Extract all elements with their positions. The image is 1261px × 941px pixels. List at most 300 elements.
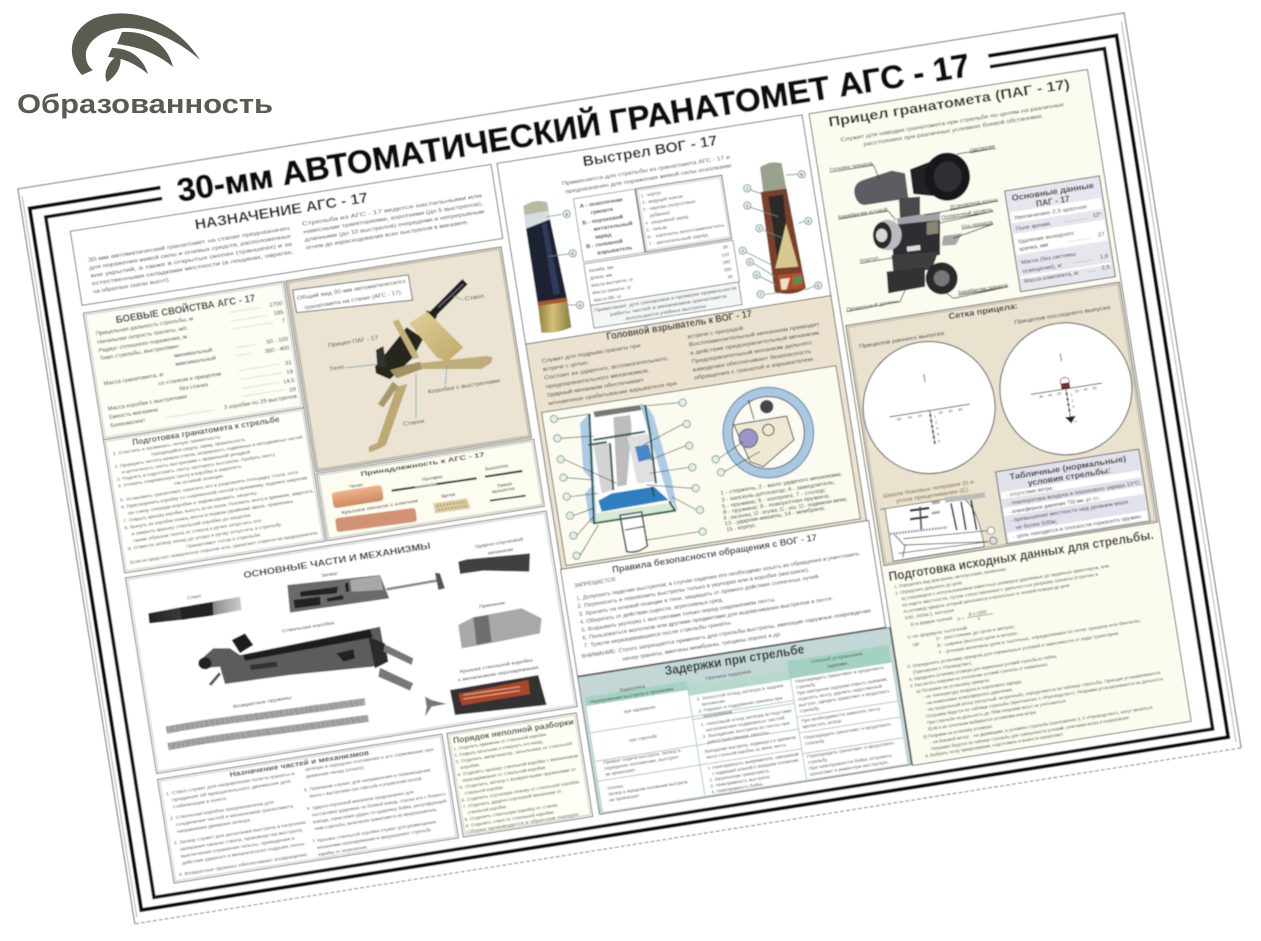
label: ранний выпуск: Прицелов раннего выпуска xyxy=(859,331,945,350)
panel: назначение АГС-17 xyxy=(70,164,503,305)
heading: назначение частей: Назначение частей и механизмов xyxy=(229,748,370,779)
illustration: grenade launcher on tripod: гранатомета на станке (АГС - 17). xyxy=(304,290,404,311)
illustration: VOG round and section: 3 xyxy=(758,226,761,231)
text block: purpose left: естественными складками местности (в лощинах, оврагах, xyxy=(91,249,294,288)
table text: 4. Неисправность бойка. xyxy=(711,780,764,795)
text block: preparation steps: 4. Уложить снаряженную ленту в коробку и закрепить xyxy=(118,464,242,488)
heading: правила безопасности: Правила безопасности обращения с ВОГ - 17 xyxy=(611,532,818,576)
text block: firing data: 1. Определить вид пристрелки, метеоусловия, назначение xyxy=(894,566,1007,589)
text block: fuze left: мгновенное срабатывание взрывателя при xyxy=(548,381,677,407)
text block: safety rules: 2. Переносить и перевозить выстрелы только в укупорке или в коробке (магазине). xyxy=(577,567,811,610)
illustration: VOG round and section: 4 xyxy=(742,248,745,253)
box: табличные условия стрельбы: - цель находится в плоскости горизонта оружия. xyxy=(1013,514,1143,540)
text block: firing data: 3. Определить установку прицела для нормальных условий в зависимости от вида траектории. xyxy=(907,629,1120,669)
box: VOG parts: метательный xyxy=(593,220,633,233)
text block: safety rules: 3. Хранить на огневой позиции в тени, защищать от прямого действия солнечных лучей. xyxy=(578,573,821,618)
box: табличные условия стрельбы: - температура воздуха и порохового заряда 15°С; xyxy=(1007,480,1142,507)
fuze legend: 1 - стержень, 2 - жало ударного механизма; xyxy=(720,472,843,497)
part: springs xyxy=(167,702,365,730)
text block: preparation steps: 8. Вынуть из коробки конец ленты в первом (крайнем) звене, приемника xyxy=(124,498,293,530)
text block: safety rules xyxy=(570,538,873,669)
text block: firing data: а) Поправки на установку прицела: xyxy=(916,677,991,694)
reticle: early: 1 xyxy=(934,415,936,419)
table: PAG-17 main data: Увеличение 2,5 кратное xyxy=(1014,204,1088,222)
text block: parts purpose left: запирания канала ствола, производства выстрела, xyxy=(179,827,304,852)
text block: parts purpose right: взвода, нанесения удара по ударнику бойка, регулирующий xyxy=(313,797,447,824)
reticle: late: 20 xyxy=(1057,392,1061,396)
text block: fuze right: в действие предохранительный механизм. xyxy=(690,329,821,357)
text block: parts purpose right: темп стрельбы, включения гранатомета на предохранитель. xyxy=(314,807,438,831)
text block: sight intro xyxy=(840,102,1066,152)
table: combat properties: без станка xyxy=(179,382,209,393)
text block: preparation steps: 3. Поднять и подготовить ленту, протереть выстрелы. Пробить ленту xyxy=(116,452,276,482)
table text: Неразряжение выстрела в приемнике xyxy=(589,686,674,705)
text block: firing data: 100, 200м.), которая xyxy=(904,608,955,621)
illustration: parts photos: Крышка ствольной коробки xyxy=(459,657,534,675)
table text: не произошел xyxy=(605,767,636,777)
text block: firing data: - на продольный ветер (попутный, встречный); определяются по таблице стрельбы. Принцип устанавливается xyxy=(925,669,1161,712)
text block: fuze right: встрече с преградой. xyxy=(687,325,745,341)
heading: головной взрыватель: Головной взрыватель к ВОГ - 17 xyxy=(606,309,753,343)
box: VOG section parts: 7 - метательный заряд xyxy=(648,231,709,247)
reticle: early: 20 xyxy=(918,414,922,418)
illustration: grenade launcher on tripod: Тело xyxy=(329,364,345,373)
table text: не произошел xyxy=(609,793,640,803)
text block: disassembly steps: 1. Отделить приемник от ствольной коробки. xyxy=(453,731,548,752)
text block: fuze right: обращения с гранатой и взрывателем. xyxy=(694,355,816,382)
illustration: VOG round and section: Б xyxy=(571,251,574,256)
text block: disassembly steps: 9. Отделить ствол от ствольной коробки. xyxy=(465,808,555,829)
text block: purpose left: вне укрытий, а также в открытых окопах (траншеях) и за xyxy=(90,241,294,280)
box: VOG section parts: 6 - капсюль-воспламенитель xyxy=(647,222,726,240)
illustration: accessories: Пенал xyxy=(349,482,363,489)
text block: parts purpose right: затвора в переднее положение и его торможение при xyxy=(304,747,434,772)
label: шкала боковых поправок: Шкала боковых поправок (t) и xyxy=(883,479,974,500)
panel: подготовка исходных данных xyxy=(888,527,1183,760)
text block: preparation steps: ее снизу спереди коробки и зафиксировать защелку xyxy=(128,490,258,516)
text block: safety rules: ЗАПРЕЩАЕТСЯ: xyxy=(574,577,617,589)
table: combat properties: Емкость магазина xyxy=(109,407,159,421)
box: VOG section parts: 1 - корпус xyxy=(640,190,662,198)
illustration: accessories: выколотка xyxy=(492,486,515,494)
text block: fuze right: Воспламенительный механизм приводит xyxy=(688,321,820,348)
part: receiver xyxy=(198,627,387,684)
part: barrel xyxy=(148,597,242,623)
text block: parts purpose left: 4. Возвратные пружины обеспечивают возвращение xyxy=(178,852,308,877)
fuze legend: 3 - капсюль-детонатор; 4 - замедлитель; xyxy=(721,480,836,504)
text block: firing data: б) Поправки на установку угломера: xyxy=(923,724,993,740)
table text: ленту стальной коробки, из звена ленты. xyxy=(705,741,787,760)
text block: preparation steps: и целостность ленты выстрелами с правильной укладкой xyxy=(121,448,251,475)
box: табличные условия стрельбы: Табличные (нормальные) xyxy=(1009,453,1127,482)
illustration: parts photos: Ствольная коробка xyxy=(282,620,335,634)
table text: Прекрат подачи выстрела. Затвор в xyxy=(603,748,681,765)
fuze legend: 8 - пружина; 9 - поворотная пружина; xyxy=(723,493,831,516)
illustration: VOG round and section xyxy=(523,162,822,333)
text block: firing data: б) 80 в их сочетании выбирается условиями или ветра. xyxy=(928,709,1037,732)
text block: parts purpose right: движении назад (откате). xyxy=(306,765,366,779)
illustration: VOG round and section: 6 xyxy=(756,273,759,278)
text block: firing data: D = xyxy=(957,616,965,622)
text block: firing data: - на боковой ветер; - на деривацию; в условиях стрельбы (приложение 3, 4 «Руководство»), могут меняться xyxy=(930,704,1153,745)
table text: с подающей штангой в переднем положении. xyxy=(712,756,800,776)
reticle: late xyxy=(990,313,1141,464)
panel: порядок неполной разборки xyxy=(447,713,593,837)
text block: preparation steps: и закрыть крышку ствольной коробки до защелки xyxy=(131,512,251,536)
reticle: early: 60 xyxy=(897,417,901,422)
reticle: late: 2 xyxy=(1071,399,1074,403)
table: combat properties: Масса коробки с выстрелами xyxy=(107,394,188,413)
text block: disassembly steps: ствольной коробки. xyxy=(467,803,507,815)
panel: правила безопасности xyxy=(561,520,886,676)
text block: parts purpose left xyxy=(165,770,312,877)
table text: при стрельбе xyxy=(629,733,658,743)
illustration: parts photos: Возвратные пружины xyxy=(233,695,293,710)
text block: firing data: (Приложения 2 «Руководства»). xyxy=(913,660,973,675)
text block: parts purpose left: стабилизации в полете. xyxy=(173,796,228,809)
table text: стрельбу. xyxy=(796,682,816,690)
text block: safety rules: 5. Вскрывать укупорку с выстрелами только перед снаряжением ленты. xyxy=(581,597,777,634)
illustration: parts photos: механизм xyxy=(488,547,514,557)
table text: Перезарядить гранатомет и продолжить xyxy=(807,740,895,759)
table text: при заряжании xyxy=(623,704,656,714)
heading: порядок разборки: Порядок неполной разборки xyxy=(452,716,574,745)
reticle: early: 40 xyxy=(948,409,953,414)
diagram: scale of corrections xyxy=(878,478,1007,574)
table: VOG specs: 120 xyxy=(721,252,730,258)
illustration: PAG-17 sight: Поперечный уровень xyxy=(941,207,994,220)
text block: purpose right: навесными траекториями, короткими (до 5 выстрелов), xyxy=(303,201,484,236)
reticle: late: 60 xyxy=(1092,386,1097,391)
box: VOG note xyxy=(590,282,742,328)
table text: выстрел, зарядить гранатомет и продолжить xyxy=(798,688,891,708)
table: PAG-17 main data: Основные данные xyxy=(1011,180,1095,203)
text block: fuze left: Состоит из ударного, вспомогательного, xyxy=(544,356,670,382)
table: PAG-17 main data: 1,8 xyxy=(1100,253,1109,261)
illustration: PAG-17 sight: Наглазник xyxy=(969,144,995,153)
text block: disassembly steps: ствольной коробки. xyxy=(464,784,504,796)
text block: VOG intro xyxy=(562,155,732,196)
text block: purpose left xyxy=(88,225,296,295)
illustration: PAG-17 sight: Ось прицела xyxy=(961,219,994,229)
box: VOG parts: заряд xyxy=(594,232,612,241)
table: PAG-17 main data: ПАГ - 17 xyxy=(1035,193,1071,209)
illustration: VOG round and section: 7 xyxy=(760,292,763,297)
panel: задержки при стрельбе xyxy=(578,627,912,814)
box: VOG note: Примечание: для тренировок и проверки правильности xyxy=(594,285,737,313)
box: VOG section parts: 3 - нарезка (полуготовые xyxy=(643,199,696,212)
table: combat properties: 3 коробки по 29 выстрелов xyxy=(224,394,298,411)
text block: safety rules: начер гранаты, вмятины мембраны, трещины пороха и др. xyxy=(622,632,782,663)
logo: Образованность xyxy=(17,13,273,119)
text block: firing data: - на изменение атмосферного давления; xyxy=(924,687,1013,706)
text block: preparation steps: 9. Отвести затвор назад до упора и ручку отпустить в стрельбу xyxy=(127,522,282,551)
table: PAG-17 main data: 12° xyxy=(1092,212,1102,219)
fuze legend: 8 - заслонка; 10 - втулка; 11 - ось; 12 - подвижная вилка; xyxy=(723,497,848,522)
reticle: early: 4 xyxy=(937,432,939,437)
illustration: PAG-17 sight xyxy=(829,144,1009,312)
text block: safety rules: 4. Оберегать от действия сырости, агрессивных сред. xyxy=(580,596,724,626)
table text: Перезарядить гранатомет и продолжить xyxy=(795,665,885,684)
table: VOG specs: Масса ВВ, гр xyxy=(593,294,622,303)
text block: parts purpose left: 1. Ствол служит для направления полета гранаты и xyxy=(165,771,295,796)
table text: гранатомет в ремонтную мастерскую. xyxy=(809,759,889,777)
text block: fuze left: предохранительного механизмов. xyxy=(545,368,650,391)
text block: firing data: В - ширина (высота) цели в метрах; xyxy=(937,630,1019,648)
reticle: early: 2 xyxy=(935,421,937,425)
text block: firing data: где xyxy=(912,641,920,647)
text block: purpose left: 30-мм автоматический гранатомет на станке предназначен xyxy=(88,225,290,264)
illustration: VOG round and section: А xyxy=(807,219,810,224)
table text: 1. Неполный отход затвора вследствие xyxy=(700,707,792,727)
table: VOG specs: 30 xyxy=(722,244,729,250)
illustration: parts photos: Ствол xyxy=(187,593,202,601)
box: табличные условия стрельбы: - атмосферное давление 750 мм. рт. ст.; xyxy=(1009,495,1101,516)
table: combat properties: 31 xyxy=(285,360,292,367)
text block: fuze right: взведения обеспечивает безопасность xyxy=(692,349,812,374)
table: combat properties: 50 - 100 xyxy=(266,336,289,346)
illustration: grenade launcher on tripod: Ствол xyxy=(464,294,484,303)
title: 30-мм АВТОМАТИЧЕСКИЙ ГРАНАТОМЕТ АГС - 17 xyxy=(174,47,972,209)
text block: parts purpose right: 7. Крышка ствольной коробки служит для размещения xyxy=(312,818,437,844)
text block: purpose right: огнем до израсходования всех выстрелов в магазине. xyxy=(305,220,470,251)
table text: отделить ленту, удалить недосланный xyxy=(797,682,883,702)
table: combat properties: Масса гранатомета, кг xyxy=(103,372,165,387)
text block: fuze right xyxy=(687,313,825,382)
diagram box: fuze section xyxy=(524,341,874,605)
table: combat properties: 14,5 xyxy=(283,378,296,386)
illustration: VOG round and section: 1 xyxy=(746,186,749,191)
table: VOG specs: Длина, мм xyxy=(590,272,613,281)
illustration: grenade launcher on tripod: Коробка с выстрелами xyxy=(428,378,500,395)
illustration: accessories xyxy=(331,451,526,532)
table: VOG specs: 280 xyxy=(722,259,731,265)
text block: firing data: Поправки берутся по таблице стрельбы (приложение 1 «Руководство»). Поправки устанавливаются на дальность xyxy=(926,676,1164,719)
illustration: parts photos xyxy=(148,535,547,747)
text block: firing data: по карте местности, путем сопоставления с дальностью разрыва гранаты (стрелка в xyxy=(902,572,1099,608)
part: receiver tray xyxy=(458,608,542,648)
table text: стрельбу. xyxy=(799,706,820,714)
table: VOG specs: Масса гранаты, гр xyxy=(592,284,632,295)
text block: firing data: 2. Определить дальность до цели: xyxy=(895,580,963,596)
illustration: parts photos: с механизмом перезаряжания xyxy=(458,665,539,683)
illustration: grenade launcher on tripod xyxy=(293,275,500,453)
text block: firing data: а) глазомерно с использованием известных размеров удаленных до заданных ориентиров, или xyxy=(901,563,1110,601)
text block: firing data: - на температуру воздуха и порохового заряда; xyxy=(923,679,1022,700)
text block: parts purpose left: 2. Ствольная коробка предназначена для xyxy=(169,799,274,821)
table text: 3. Неисправность выстрела. xyxy=(710,774,771,789)
reticle: late: 20 xyxy=(1075,389,1079,393)
heading: назначение: НАЗНАЧЕНИЕ АГС - 17 xyxy=(194,189,369,234)
illustration: PAG-17 sight: Головка прицела xyxy=(829,160,874,172)
table text: Задержка xyxy=(619,684,646,693)
text block: disassembly steps: Сборка производится в обратном порядке. xyxy=(466,811,581,834)
table text: Осечка. xyxy=(607,783,624,791)
table: combat properties: 29 xyxy=(289,387,296,394)
box: VOG section parts: 4 - разрывной заряд xyxy=(645,213,689,226)
box: VOG section parts xyxy=(636,175,732,252)
text block: parts purpose right: 6. Ударно-спусковой механизм предназначен для xyxy=(306,788,415,811)
text block: firing data: D - расстояние до цели в метрах; xyxy=(936,624,1015,641)
table: PAG-17 main data: 2,5 xyxy=(1101,264,1111,272)
text block: preparation steps: 1. Очистить и промазать легкую приметность: xyxy=(112,434,222,456)
illustration: PAG-17 sight: Барабанчик прицела xyxy=(958,282,1009,295)
table text: положение. xyxy=(701,698,726,707)
illustration: parts photos: Ударно-спусковой xyxy=(474,535,524,550)
text block: purpose left: на обратных скатах высот). xyxy=(93,277,171,295)
text block: disassembly steps: 6. Отделить спусковую планку от ствольной коробки. xyxy=(461,778,580,803)
table text: перезаряжании. xyxy=(703,709,733,719)
reticle: early: 60 xyxy=(958,407,963,412)
table: combat properties: 350 - 400 xyxy=(264,345,291,355)
table text: 1. Неисправность выпрямителя, смешанной xyxy=(707,750,799,771)
text block: disassembly steps: 4. Отделить крышку ствольной коробки с механизмом xyxy=(457,752,578,777)
reticle: late: 1 xyxy=(1070,393,1073,397)
reticle: late: 3 xyxy=(1072,405,1075,409)
table text: Выпадение выстрела, подающего в приемник xyxy=(705,734,797,754)
illustration: VOG round and section: В xyxy=(800,172,803,177)
label: последний выпуск: Прицелов последнего выпуска xyxy=(1014,305,1111,326)
panel: сетка прицела xyxy=(846,282,1159,575)
table: VOG specs: Калибр, мм xyxy=(589,264,614,273)
panel: принадлежность xyxy=(313,420,548,563)
box: VOG parts: А - осколочная xyxy=(579,197,624,210)
table text: 1. Холостой отход затвора в заднее xyxy=(696,682,784,702)
table: combat properties: максимальный xyxy=(175,355,216,368)
text block: disassembly steps: 3. Отделить амортизатор, затыльника от ствольной xyxy=(455,740,573,764)
text block: firing data: С по формуле тысячной xyxy=(907,624,968,640)
text block: parts purpose right: постановки ударника на боевой взвод, спуска его с боевого xyxy=(311,790,446,818)
part: cover xyxy=(450,675,547,715)
table text: 2. Перекос и поддувание гранаты при xyxy=(698,695,783,714)
text block: preparation steps: 6. Присоединить коробку со снаряженной лентой к приемнику, надежно закрепив xyxy=(121,474,308,510)
text block: fuze left: Ударный механизм обеспечивает xyxy=(546,377,645,399)
text block: preparation steps: На огневой позиции: xyxy=(174,472,224,486)
table text: переднем положении, выстрел xyxy=(604,754,679,771)
label: шкала боковых поправок xyxy=(883,479,976,507)
table: PAG-17 main data: Поле зрения xyxy=(1015,221,1051,233)
table text: При неисправности бойка отправить xyxy=(808,752,893,771)
panel: боевые свойства xyxy=(83,281,304,440)
table: PAG-17 main data: Масса комплекта, кг xyxy=(1024,270,1079,285)
text block: safety rules: 6. Пользоваться молотком или другими предметами для выравнивания выстрелов в ленте. xyxy=(582,596,834,642)
text block: preparation steps: 7. Открыть крышку коробки, вынуть из ее пазов. Положить ленту в приемник, закрепить xyxy=(123,488,314,524)
table: PAG-17 main data: Масса (без системы xyxy=(1021,252,1076,266)
illustration: grenade launcher on tripod: Прицел ПАГ - 17 xyxy=(328,335,379,349)
text block: firing data: 6. Выбрать точку прицеливания, подготовить и вывести гранатомет. xyxy=(925,731,1064,758)
table: combat properties: 1700 xyxy=(269,301,284,309)
table text: расстрелянии ленты xyxy=(707,730,769,745)
table text: 2. Выпадение выстрела из ленты при xyxy=(702,720,790,739)
illustration: PAG-17 sight: Корпус xyxy=(859,255,880,263)
text block: disassembly steps: 8. Отделить ствольную коробку от станка. xyxy=(464,802,559,822)
label: шкала боковых поправок: углов прицеливания (Е). xyxy=(896,487,971,505)
table: combat properties xyxy=(95,301,298,429)
text block: parts purpose left: соединения частей и механизмов гранатомета, xyxy=(175,802,295,827)
text block: firing data xyxy=(894,545,1170,759)
box: VOG note: используются учебные выстрелы. xyxy=(626,303,707,321)
text block: parts purpose right: механизма перезаряжания и предохраняет стрельбу xyxy=(317,827,432,850)
box: табличные условия стрельбы xyxy=(996,449,1150,544)
icon: logo feather arcs xyxy=(72,13,200,82)
panel: общий вид гранатомета xyxy=(265,242,533,485)
reticle: late: 40 xyxy=(1048,393,1053,398)
panel: подготовка гранатомета к стрельбе xyxy=(103,408,325,573)
text block: fuze left: Служит для подрыва гранаты при xyxy=(541,343,641,365)
table: PAG-17 main data: 27 xyxy=(1098,232,1105,239)
text block: parts purpose left: направления движения затвора. xyxy=(177,817,251,834)
table text: 2. Загрязнение гранатомета. xyxy=(709,768,770,783)
text block: fuze left: встрече с целью. xyxy=(543,360,590,373)
text block: VOG intro: предназначен для поражения живой силы осколками xyxy=(565,162,732,196)
table: VOG specs: 260 xyxy=(723,266,732,273)
table text: Способ устранения xyxy=(811,651,864,664)
heading: сетка: Сетка прицела: xyxy=(948,301,1018,321)
fuze cross-section xyxy=(580,413,597,523)
text block: fuze left xyxy=(541,338,677,407)
panel: головной взрыватель xyxy=(516,295,874,605)
text block: parts purpose left: 3. Затвор служит для досылания выстрела в патронник, xyxy=(173,819,307,846)
panel: выстрел ВОГ-17 xyxy=(496,113,848,379)
text block: disassembly steps: перезаряжания от ствольной коробки. xyxy=(462,764,547,783)
fuze legend: 13 - ударник-мишень; 14 - мембрана; xyxy=(724,506,826,528)
box: VOG parts: В - головной xyxy=(586,238,624,250)
reticle: early: 5 xyxy=(938,439,940,444)
table: PAG-17 main data: освещения), кг xyxy=(1022,263,1063,275)
panel: назначение частей и механизмов xyxy=(158,734,458,883)
box: VOG section parts: рубашка) xyxy=(650,210,670,218)
heading: подготовка: Подготовка гранатомета к стрельбе xyxy=(131,414,280,447)
box: табличные условия стрельбы: - превышение местности над уровнем моря xyxy=(1010,500,1129,524)
table: combat properties: Боекомплект xyxy=(110,418,146,429)
table text: прочистить затвор. xyxy=(802,718,843,729)
part: trigger mechanism xyxy=(458,553,530,574)
text block: sight intro: Служит для наводки гранатомета при стрельбе по целям на различных xyxy=(840,102,1065,144)
illustration: VOG round and section: 2 xyxy=(746,203,749,208)
heading: боевые свойства: БОЕВЫЕ СВОЙСТВА АГС - 17 xyxy=(115,291,256,326)
table: combat properties: Радиус сплошного поражения, м xyxy=(98,334,187,354)
illustration: grenade launcher on tripod: Общий вид 30-мм автоматического xyxy=(297,278,406,302)
text block: parts purpose left: придания ей вращательного движения для xyxy=(171,777,291,802)
illustration: grenade launcher on tripod: Станок xyxy=(403,419,426,428)
illustration: parts photos: Приемник xyxy=(479,600,506,610)
heading: подготовка исходных данных: Подготовка исходных данных для стрельбы. xyxy=(888,527,1155,584)
box: VOG parts: взрыватель xyxy=(597,245,633,257)
table text: При необходимости заменить ленту xyxy=(801,706,881,723)
illustration: VOG round and section: Б xyxy=(817,283,820,288)
illustration: accessories: Выколотка xyxy=(485,463,509,472)
text block: preparation steps: 2. Проверить чистоту канала ствола, исправность подвижных и неподвижных частей xyxy=(114,433,303,469)
text block: firing data: 5. Рассчитать поправки на отклонение условий стрельбы от нормальных. xyxy=(910,661,1049,688)
table: combat properties: 18 xyxy=(286,369,294,376)
panel: прицел гранатомета xyxy=(798,69,1191,767)
text block: preparation steps: Если не предстоит немедленное открытие огня, гранатомет ставится на предохранитель xyxy=(130,530,319,565)
illustration: PAG-17 sight: Продольный уровень xyxy=(846,298,900,312)
illustration: parts photos: ОСНОВНЫЕ ЧАСТИ И МЕХАНИЗМЫ xyxy=(243,541,431,580)
box: табличные условия стрельбы: не более 500м; xyxy=(1015,519,1058,531)
box: VOG note: работы частей и механизмов гранатомета xyxy=(610,292,728,317)
table: combat properties: Прицельная дальность стрельбы, м xyxy=(95,316,194,338)
reticle: early xyxy=(854,332,1005,483)
table: PAG-17 main data xyxy=(1005,176,1115,292)
illustration: parts photos: Затвор xyxy=(321,571,338,579)
text block: preparation steps: Находящийся сверху, заряд, правильность xyxy=(151,436,246,457)
panel: основные части и механизмы xyxy=(116,473,583,808)
reticle: early: 40 xyxy=(908,415,912,420)
reticle: late: 4 xyxy=(1074,420,1077,424)
table text: загрязнения подвижных частей xyxy=(705,714,785,733)
table text: стрельбу. xyxy=(805,738,825,746)
